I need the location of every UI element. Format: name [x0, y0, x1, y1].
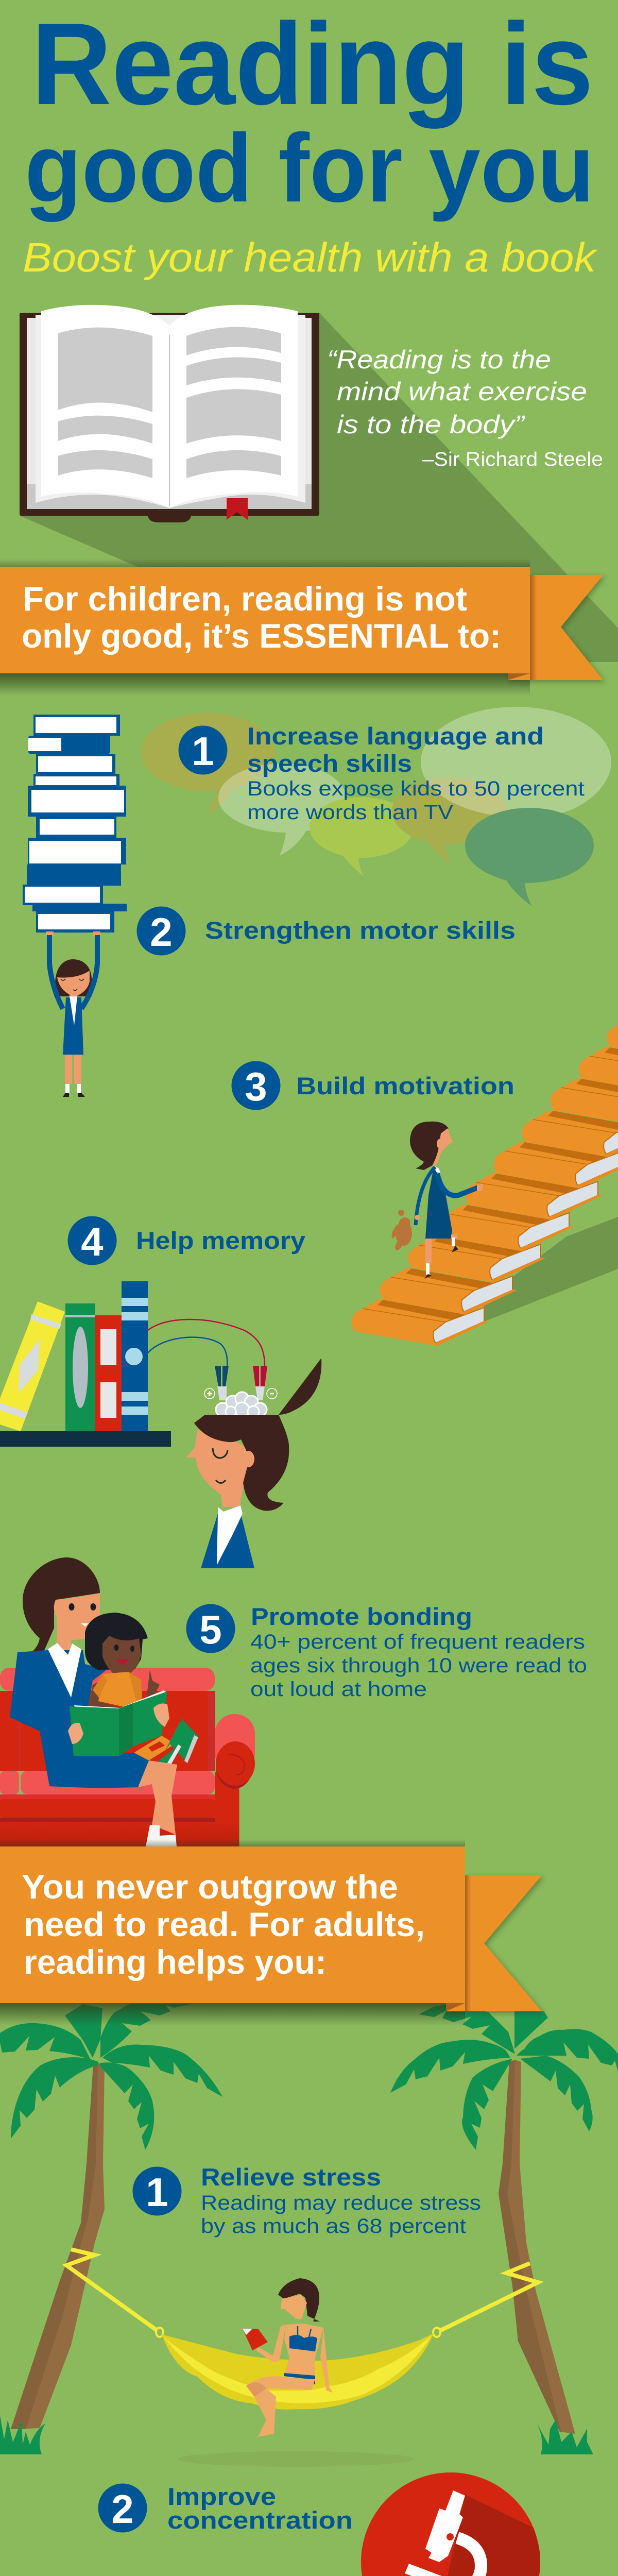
ribbon: children — [0, 559, 603, 696]
item 1: language — [178, 722, 585, 824]
item 2: motor skills — [137, 907, 516, 955]
item 1: stress — [133, 2163, 481, 2238]
item 4: memory — [68, 1216, 305, 1265]
shadow of book stairs — [484, 1217, 618, 1321]
ribbon: adults: You never outgrow the — [22, 1868, 398, 1906]
item 1: language: 1 — [192, 728, 214, 774]
icon: open book — [20, 305, 319, 522]
illustration: hammock — [66, 2249, 538, 2410]
grass — [0, 2415, 593, 2454]
illustration: stack of books — [23, 715, 127, 933]
item 1: stress: Reading may reduce stress — [201, 2192, 481, 2214]
item 3: motivation: Build motivation — [296, 1072, 514, 1099]
quote — [327, 345, 603, 470]
illustration: woman reading in hammock — [243, 2278, 333, 2437]
item 5: bonding: 40+ percent of frequent readers — [250, 1631, 585, 1653]
illustration: book stairs — [352, 1015, 618, 1346]
item 2: concentration: concentration — [167, 2506, 353, 2534]
icon: microscope — [361, 2472, 546, 2576]
illustration: bookshelf — [0, 1281, 171, 1447]
item 1: language: Increase language and — [247, 722, 544, 750]
illustration: girl lifting books — [46, 931, 100, 1097]
item 2: motor skills: 2 — [150, 909, 173, 955]
long shadow of book — [20, 313, 618, 662]
item 1: language: Books expose kids to 50 percent — [247, 777, 585, 800]
title: Reading is — [31, 0, 593, 129]
item 2: concentration — [98, 2483, 353, 2534]
item 1: stress: by as much as 68 percent — [201, 2215, 466, 2238]
item 1: stress: Relieve stress — [201, 2163, 381, 2191]
illustration: left palm tree — [0, 2004, 222, 2429]
quote: mind what exercise — [337, 377, 587, 406]
item 1: language: more words than TV — [247, 801, 453, 824]
item 5: bonding: 5 — [199, 1607, 222, 1652]
item 5: bonding — [186, 1603, 587, 1701]
item 4: memory: 4 — [81, 1219, 104, 1264]
item 3: motivation: 3 — [245, 1064, 267, 1109]
item 3: motivation — [232, 1061, 514, 1110]
item 1: stress: 1 — [146, 2170, 168, 2215]
quote: –Sir Richard Steele — [422, 449, 603, 470]
ribbon: children: only good, it’s ESSENTIAL to: — [22, 617, 501, 655]
illustration: woman with open head — [186, 1358, 321, 1568]
item 4: memory: Help memory — [136, 1227, 305, 1254]
quote: is to the body” — [337, 410, 526, 439]
item 5: bonding: out loud at home — [250, 1678, 427, 1701]
illustration: right palm tree — [390, 2003, 618, 2434]
item 2: concentration: Improve — [167, 2483, 276, 2510]
title — [25, 0, 594, 222]
speech bubbles — [141, 707, 611, 906]
ground shadow — [177, 2451, 414, 2467]
illustration: girl climbing with teddy — [390, 1122, 483, 1279]
title: good for you — [25, 114, 594, 222]
item 5: bonding: Promote bonding — [251, 1603, 472, 1630]
quote: “Reading is to the — [327, 345, 551, 374]
illustration: mother and child reading — [10, 1557, 198, 1846]
ribbon: children: For children, reading is not — [23, 580, 467, 618]
illustration: jumper cables and brain — [148, 1319, 277, 1417]
item 2: motor skills: Strengthen motor skills — [205, 917, 516, 944]
item 5: bonding: ages six through 10 were read to — [250, 1654, 587, 1677]
item 2: concentration: 2 — [111, 2486, 134, 2532]
illustration: red sofa — [0, 1668, 255, 1846]
ribbon: adults — [0, 1839, 542, 2026]
ribbon: adults: need to read. For adults, — [24, 1905, 425, 1943]
item 1: language: speech skills — [247, 750, 412, 777]
subtitle: Boost your health with a book — [23, 234, 598, 280]
ribbon: adults: reading helps you: — [24, 1943, 327, 1981]
